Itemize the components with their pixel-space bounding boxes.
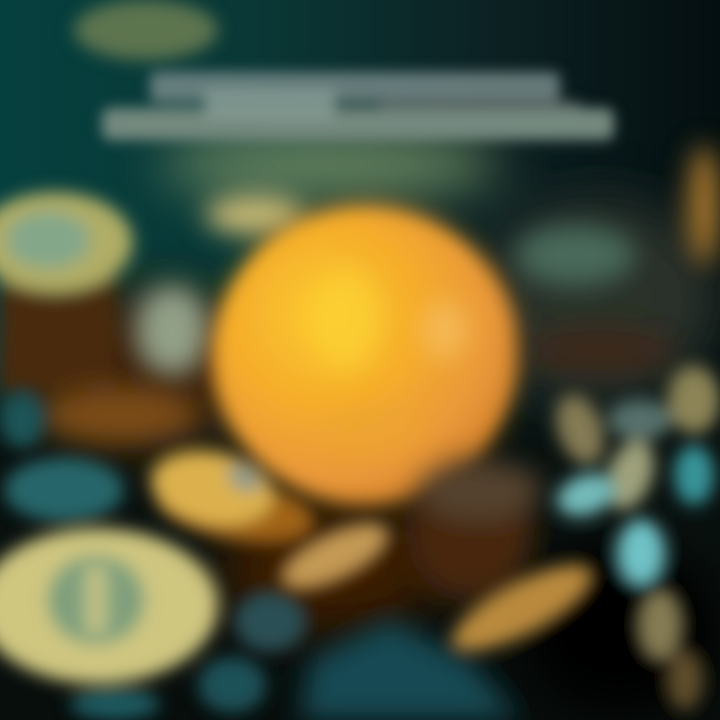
blurred title text — [102, 72, 614, 140]
background colour glows — [10, 133, 720, 715]
lower left brown coin — [42, 387, 198, 443]
light smudge left of big coin — [136, 195, 305, 375]
big glowing golden coin — [215, 204, 516, 504]
teal coins — [0, 392, 306, 720]
large pale gold coin: bottom left — [0, 528, 218, 684]
dark lower background — [0, 360, 720, 720]
cyan coins: right — [551, 445, 714, 587]
background coins: upper right — [515, 145, 720, 376]
gold coin: centre left — [145, 442, 319, 553]
gold coin: centre — [273, 511, 397, 601]
small coins: right cluster — [547, 366, 720, 710]
teal slab: bottom centre — [300, 620, 520, 720]
gold coin: lower right — [441, 549, 603, 667]
blurred background coin: top left — [74, 0, 218, 60]
coin stack: left — [0, 192, 133, 390]
dark brown coin stack — [406, 458, 542, 602]
